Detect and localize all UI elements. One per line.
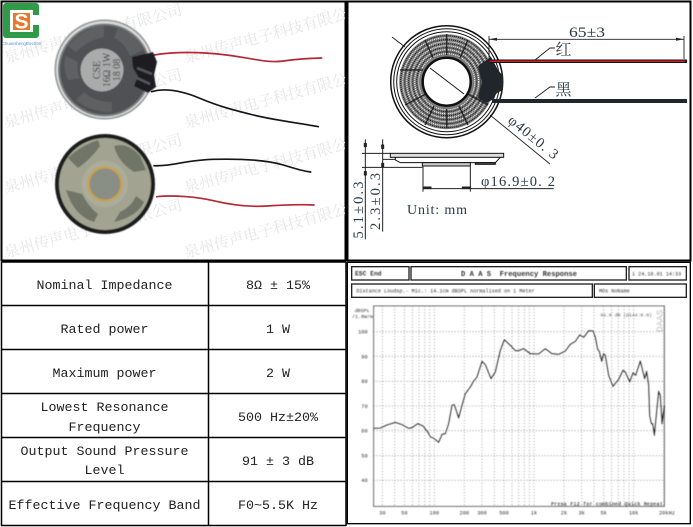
row: lowest resonance frequency [41, 401, 318, 436]
y axis labels: 70 [361, 404, 368, 410]
speaker label text: CSE [92, 61, 103, 79]
x axis labels: 5k [600, 510, 607, 516]
row: effective frequency band [9, 499, 318, 514]
watermark text: 泉州传声电子科技有限公司 [2, 131, 184, 197]
label: red wire: 红 [556, 41, 572, 59]
row: maximum power [53, 367, 290, 382]
chart annotations: Press F12 for combined Quick Repeat [551, 502, 663, 508]
header boxes: D A A S Frequency Response [461, 271, 577, 279]
x axis labels: 500 [499, 510, 509, 516]
wire: black lead [492, 99, 687, 103]
x axis labels: 1k [531, 510, 537, 516]
wires: photo speakers [152, 52, 322, 206]
speaker label text: 18 08 [112, 59, 123, 81]
panel: product photo [2, 1, 364, 262]
chart annotations: 91.0 dB (Ω144:0.0) [600, 312, 652, 318]
row: rated power: 1 W [266, 323, 290, 338]
x axis labels: 200 [460, 510, 469, 516]
x axis labels: 100 [430, 510, 439, 516]
drawing: speaker side view [390, 153, 504, 166]
x axis labels: 3k [578, 510, 585, 516]
row: nominal impedance: 8Ω ± 15% [246, 279, 310, 294]
speaker label text: 16Ω 1W [102, 52, 113, 87]
row: nominal impedance: Nominal Impedance [37, 279, 172, 294]
watermark text [2, 1, 364, 262]
watermark text: 泉州传声电子科技有限公司 [182, 196, 364, 262]
watermark text: 泉州传声电子科技有限公司 [182, 1, 364, 67]
chart annotations [551, 309, 665, 508]
y axis labels: 50 [361, 453, 368, 459]
dimension: side heights and magnet diameter: 2.3±0.3 [368, 173, 384, 230]
row: output sound pressure level: Level [84, 464, 124, 479]
y axis labels: 60 [361, 429, 368, 435]
row: output sound pressure level: Output Sound Pressure [21, 445, 188, 460]
logo [2, 3, 42, 46]
row: effective frequency band: Effective Frequency Band [9, 499, 200, 514]
x axis labels: 20kHz [659, 510, 675, 516]
logo: ChuanshengElectron [2, 41, 42, 46]
watermark text: 泉州传声电子科技有限公司 [182, 131, 364, 197]
table: specifications [2, 262, 346, 526]
x axis labels [379, 510, 675, 516]
watermark text: 泉州传声电子科技有限公司 [2, 196, 184, 262]
row: nominal impedance [37, 279, 310, 294]
label: black wire: 黑 [556, 81, 572, 99]
panel: dimension drawing [348, 2, 690, 260]
y axis labels: dBSPL [355, 308, 370, 314]
row: lowest resonance frequency: 500 Hz±20% [238, 411, 318, 426]
watermark text: 泉州传声电子科技有限公司 [2, 66, 184, 132]
row: rated power: Rated power [61, 323, 148, 338]
row: maximum power: Maximum power [53, 367, 156, 382]
row: effective frequency band: F0~5.5K Hz [238, 499, 318, 514]
unit note: Unit: mm [407, 203, 467, 218]
header boxes: MOs NoName [599, 288, 630, 294]
label: red wire [535, 41, 572, 60]
dimension: side heights and magnet diameter: 5.1±0.3 [351, 182, 367, 238]
row: lowest resonance frequency: Frequency [69, 421, 140, 436]
row: lowest resonance frequency: Lowest Resonance [41, 401, 168, 416]
y axis labels: /1.0W/m [352, 314, 373, 320]
row: output sound pressure level [21, 445, 314, 479]
logo: S [14, 10, 29, 34]
x axis labels: 2k [561, 510, 567, 516]
speaker: rear view [55, 134, 155, 234]
y axis labels [352, 308, 373, 484]
y axis labels: 80 [361, 379, 368, 385]
x axis labels: 30 [379, 510, 386, 516]
chart: frequency response curve [352, 306, 675, 516]
y axis labels: 90 [361, 354, 368, 360]
header boxes: i 24.10.01 14:33 [632, 271, 681, 277]
chart annotations: DAAS [654, 309, 665, 332]
dimension: lead length: 65±3 [569, 25, 605, 41]
row: maximum power: 2 W [266, 367, 290, 382]
dimension: outer diameter: φ40±0. 3 [504, 113, 561, 163]
x axis labels: 10k [629, 510, 638, 516]
dimension: side heights and magnet diameter [351, 139, 555, 239]
y axis labels: 40 [361, 478, 368, 484]
y axis labels: 100 [358, 329, 368, 335]
wire: red lead [490, 60, 687, 63]
header boxes [352, 267, 686, 297]
speaker label text [92, 52, 123, 87]
header boxes: ESC End [355, 270, 382, 277]
dimension: outer diameter [392, 37, 561, 164]
watermark text: 泉州传声电子科技有限公司 [2, 1, 184, 67]
header boxes: Distance Loudsp.- Mic.: 14.1cm dBSPL normalised on 1 Meter [356, 288, 535, 294]
speaker: front view [54, 20, 157, 120]
dimension: lead length [489, 25, 684, 61]
panel: frequency response [347, 262, 690, 524]
dimension: side heights and magnet diameter: φ16.9±0. 2 [481, 174, 555, 190]
row: rated power [61, 323, 290, 338]
x axis labels: 300 [477, 510, 487, 516]
label: black wire [535, 81, 572, 99]
x axis labels: 50 [401, 510, 408, 516]
watermark text: 泉州传声电子科技有限公司 [182, 66, 364, 132]
drawing: speaker top view [391, 26, 503, 138]
row: output sound pressure level: 91 ± 3 dB [242, 455, 314, 470]
